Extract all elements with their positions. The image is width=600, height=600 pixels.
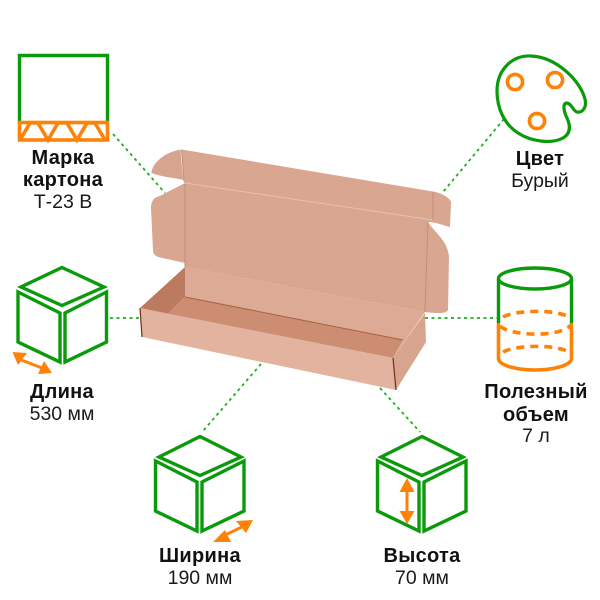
box lid flaps bbox=[151, 150, 451, 313]
panel: cardboard grade bbox=[20, 56, 108, 169]
icon: cylinder bbox=[498, 268, 572, 370]
icon: corrugated cardboard bbox=[20, 56, 108, 140]
panel: length bbox=[12, 268, 106, 425]
icon: palette bbox=[497, 56, 585, 141]
value: useful volume: 7 л bbox=[522, 425, 550, 447]
value: colour: Бурый bbox=[511, 170, 569, 192]
value: height: 70 мм bbox=[395, 567, 449, 589]
icon: cube with height arrow bbox=[378, 436, 466, 531]
value: cardboard grade: Т-23 В bbox=[34, 191, 92, 213]
panel: height bbox=[378, 436, 466, 589]
icon: cube with width arrow bbox=[156, 436, 253, 542]
value: width: 190 мм bbox=[168, 567, 232, 589]
box front and side walls bbox=[140, 308, 426, 390]
leader lines bbox=[110, 119, 504, 432]
icon: cube with length arrow bbox=[12, 268, 106, 374]
label: colour: Цвет bbox=[516, 148, 564, 170]
label: height: Высота bbox=[383, 545, 461, 567]
box interior bbox=[140, 267, 425, 358]
value: length: 530 мм bbox=[30, 403, 94, 425]
panel: colour bbox=[497, 56, 585, 192]
label: length: Длина bbox=[30, 381, 95, 403]
label: cardboard grade second line: картона bbox=[23, 169, 104, 191]
label: useful volume second line: объем bbox=[503, 404, 569, 426]
label: useful volume: Полезный bbox=[484, 381, 588, 403]
panel: useful volume bbox=[484, 268, 588, 403]
panel: width bbox=[156, 436, 253, 589]
label: width: Ширина bbox=[159, 545, 242, 567]
label: cardboard grade: Марка bbox=[32, 147, 95, 169]
product photo: open cardboard box bbox=[140, 150, 451, 390]
